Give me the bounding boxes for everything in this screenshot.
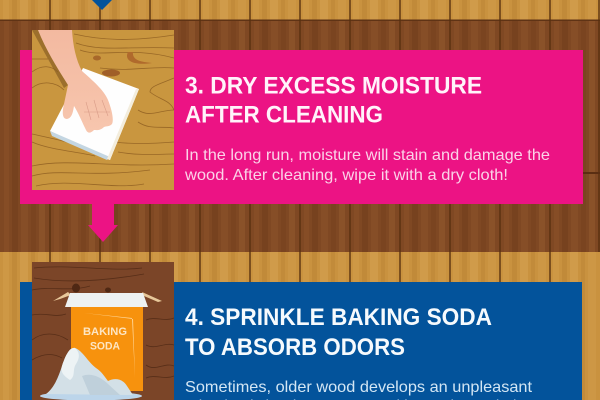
blue panel background xyxy=(20,282,582,400)
body text: step 3 xyxy=(184,147,550,184)
heading: step 4: TO ABSORB ODORS xyxy=(185,334,405,361)
box body xyxy=(71,307,143,391)
hand xyxy=(38,30,113,133)
box label: BAKING xyxy=(83,326,127,338)
heading: step 4: 4. SPRINKLE BAKING SODA xyxy=(185,304,492,331)
cloth xyxy=(50,68,139,160)
heading: step 3: 3. DRY EXCESS MOISTURE xyxy=(185,72,482,100)
illustration: hand wiping wood with cloth xyxy=(32,30,174,190)
box label: SODA xyxy=(90,340,120,352)
heading: step 4 xyxy=(185,304,492,361)
body text: step 3: wood. After cleaning, wipe it with a dry cloth! xyxy=(184,167,508,184)
panel: step 3 xyxy=(20,30,583,204)
body text: step 3: In the long run, moisture will stain and damage the xyxy=(185,147,550,164)
heading: step 3: AFTER CLEANING xyxy=(185,102,383,128)
arrow: blue from previous step xyxy=(92,0,112,10)
baking soda pile xyxy=(40,392,142,400)
box label xyxy=(83,326,127,352)
box lid xyxy=(65,293,148,307)
pink panel background xyxy=(20,50,583,204)
illustration: baking soda box xyxy=(32,262,174,400)
box flaps xyxy=(53,292,162,302)
body text: step 4: Sometimes, older wood develops an unpleasant xyxy=(185,379,533,396)
heading: step 3 xyxy=(185,72,482,128)
arrow: pink step 3 to step 4 xyxy=(88,204,118,242)
panel: step 4 xyxy=(20,262,582,400)
